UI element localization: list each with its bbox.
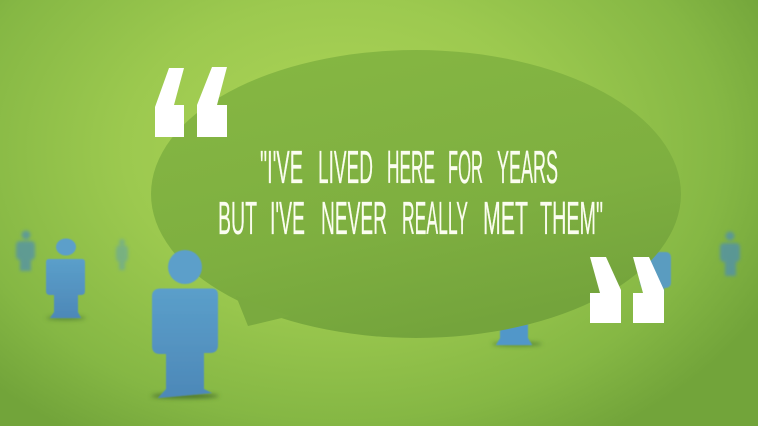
quote text: FOR: [448, 141, 483, 193]
quote text: [218, 141, 603, 244]
figure: behind bubble bottom: [492, 320, 542, 346]
quote text: MET: [483, 192, 528, 244]
closing quotation mark: [590, 257, 664, 323]
figure: medium left: [46, 238, 86, 320]
figure: large foreground: [151, 250, 219, 398]
speech bubble: [151, 50, 681, 338]
figure: behind bubble right: [640, 252, 671, 295]
quote text: REALLY: [402, 192, 468, 244]
figure: far right blurred: [720, 232, 740, 276]
figure: far left blurred: [16, 230, 35, 271]
quote text: NEVER: [321, 192, 387, 244]
opening quotation mark: [155, 67, 227, 137]
figure: small left blurred: [116, 239, 128, 270]
quote text: YEARS: [497, 141, 558, 193]
quote text: HERE: [387, 141, 435, 193]
infographic scene: THEM": [540, 192, 603, 244]
quote text: BUT: [218, 192, 257, 244]
quote text: I'VE: [270, 192, 305, 244]
quote text: LIVED: [318, 141, 373, 193]
quote text: "I'VE: [260, 141, 303, 193]
